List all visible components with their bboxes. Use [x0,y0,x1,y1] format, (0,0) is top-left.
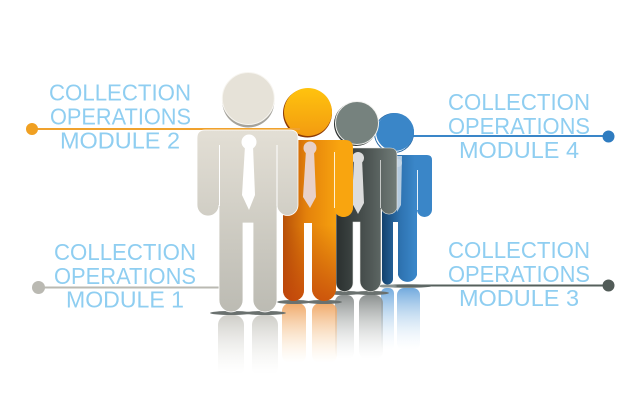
dot: module 2 [26,123,38,135]
label: collection operations module 2 [49,80,191,154]
label: collection operations module 1: COLLECTION [54,239,196,265]
label: collection operations module 3: MODULE 3 [459,285,579,311]
line: module 3 connector [418,284,608,286]
label: collection operations module 1: OPERATIONS [54,263,196,289]
label: collection operations module 2: COLLECTION [49,80,191,106]
figure: blue person [370,113,432,288]
label: collection operations module 4: MODULE 4 [459,137,579,163]
label: collection operations module 3: OPERATIONS [448,261,590,287]
label: collection operations module 3: COLLECTION [448,237,590,263]
figure: light grey person [197,72,298,315]
reflection: floor mirror of figures [218,288,420,377]
figure: orange person [270,88,353,304]
label: collection operations module 4: OPERATIONS [448,113,590,139]
label: collection operations module 1 [54,239,196,312]
line: module 4 connector [412,135,608,137]
dot: module 4 [602,130,614,142]
label: collection operations module 4: COLLECTION [448,89,590,115]
dot: module 1 [32,281,45,294]
label: collection operations module 3 [448,237,590,311]
label: collection operations module 1: MODULE 1 [66,286,184,312]
line: module 2 connector [32,128,300,130]
line: module 1 connector [38,286,222,288]
label: collection operations module 4 [448,89,590,163]
figure: dark grey person [326,102,397,295]
label: collection operations module 2: MODULE 2 [60,128,180,154]
label: collection operations module 2: OPERATIONS [50,104,191,130]
dot: module 3 [602,280,614,292]
